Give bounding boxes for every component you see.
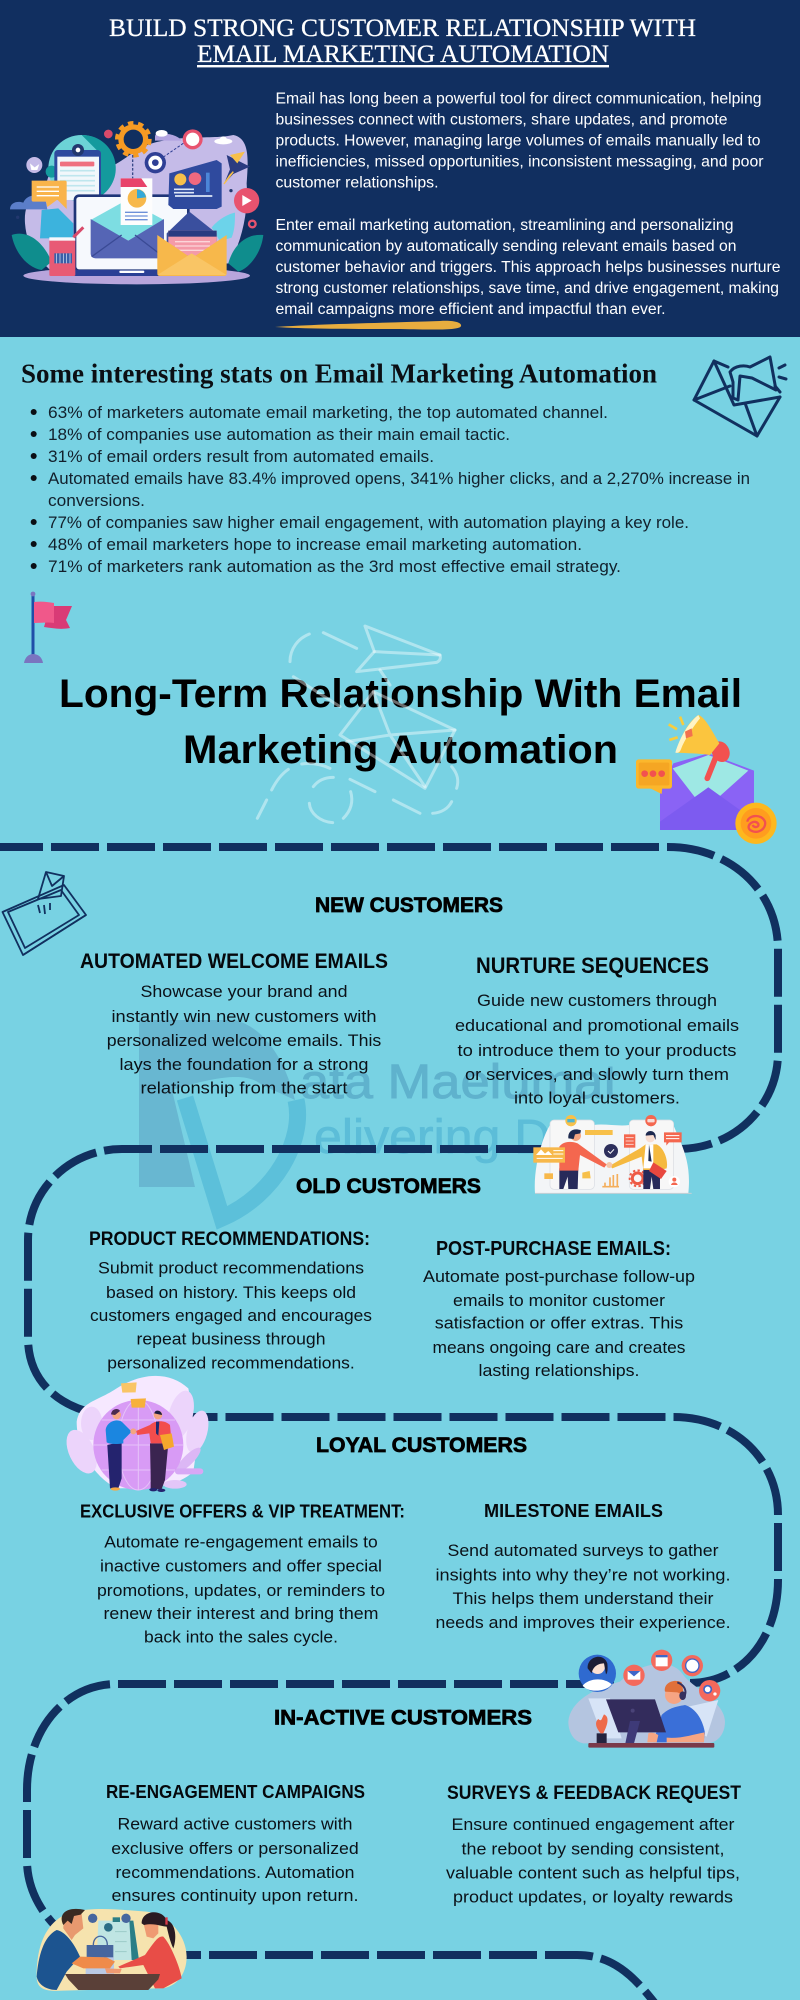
main title [59,672,742,772]
card: surveys and feedback: SURVEYS & FEEDBACK REQUEST [447,1782,741,1804]
decorative paper planes [257,626,458,823]
card: nurture sequences: to introduce them to your products [458,1042,736,1060]
card: product recommendations: repeat business through [136,1330,326,1348]
intro text: strong customer relationships, save time, and drive engagement, making [276,280,779,297]
card: product recommendations [89,1229,372,1372]
card: automated welcome emails: lays the foundation for a strong [120,1056,368,1074]
card: milestone emails [436,1500,730,1632]
card: nurture sequences: into loyal customers. [514,1090,680,1108]
stats list: 18% of companies use automation as their main email tactic. [48,426,510,444]
card: re-engagement campaigns: Reward active customers with [118,1816,352,1834]
intro text [276,90,780,318]
illustration: email marketing laptop and envelopes [10,123,263,284]
section: new customers [80,894,739,1108]
section: in-active customers: IN-ACTIVE CUSTOMERS [274,1706,532,1730]
dashed journey path [0,847,778,2000]
intro text: Email has long been a powerful tool for direct communication, helping [276,90,762,108]
card: exclusive offers: EXCLUSIVE OFFERS & VIP TREATMENT: [80,1500,405,1522]
card: product recommendations: Submit product recommendations [98,1260,364,1278]
header title: BUILD STRONG CUSTOMER RELATIONSHIP WITH [109,15,696,42]
card: re-engagement campaigns: exclusive offers or personalized [111,1840,359,1858]
stats heading: Some interesting stats on Email Marketing Automation [21,359,657,389]
card: automated welcome emails: instantly win new customers with [112,1008,376,1026]
stats list: 63% of marketers automate email marketing, the top automated channel. [48,404,608,422]
card: product recommendations: PRODUCT RECOMMENDATIONS: [89,1229,370,1250]
card: surveys and feedback: Ensure continued engagement after [452,1816,735,1834]
card: nurture sequences: Guide new customers through [477,992,717,1010]
card: exclusive offers: Automate re-engagement emails to [104,1534,378,1552]
intro text: customer relationships. [276,174,438,192]
card: nurture sequences: educational and promotional emails [455,1017,739,1035]
watermark logo: ata Maelumat [300,1056,618,1109]
card: re-engagement campaigns: ensures continuity upon return. [112,1887,358,1905]
card: product recommendations: customers engaged and encourages [90,1307,372,1325]
main title: Long-Term Relationship With Email [59,672,742,716]
intro text: email campaigns more efficient and impactful than ever. [276,301,666,318]
stats list: 31% of email orders result from automated emails. [48,448,434,466]
card: exclusive offers: promotions, updates, or reminders to [97,1582,385,1600]
card: post-purchase emails: emails to monitor customer [453,1292,666,1310]
intro text: inefficiencies, missed opportunities, inconsistent messaging, and poor [276,154,764,170]
card: post-purchase emails: satisfaction or offer extras. This [435,1314,683,1332]
intro text: customer behavior and triggers. This approach helps businesses nurture [276,259,780,276]
stats list: 77% of companies saw higher email engagement, with automation playing a key role. [48,514,689,532]
card: nurture sequences: or services, and slowly turn them [465,1066,729,1084]
intro text: products. However, managing large volumes of emails manually led to [276,132,760,150]
stats list: 48% of email marketers hope to increase email marketing automation. [48,536,582,554]
card: milestone emails: Send automated surveys to gather [448,1542,719,1560]
card: re-engagement campaigns: recommendations. Automation [116,1864,354,1882]
main title: Marketing Automation [183,728,618,772]
section: new customers: NEW CUSTOMERS [315,894,503,917]
icon: pink flag [24,592,72,663]
yellow brush stroke [275,321,461,330]
header title [109,15,696,68]
card: nurture sequences: NURTURE SEQUENCES [476,953,709,978]
card: milestone emails: needs and improves their experience. [436,1614,730,1632]
illustration: megaphone and envelope [636,715,777,844]
card: post-purchase emails: lasting relationships. [478,1362,640,1380]
section: loyal customers [80,1434,730,1646]
card: re-engagement campaigns [106,1781,365,1905]
illustration: customer support agent [568,1650,725,1748]
card: automated welcome emails: Showcase your brand and [140,983,348,1001]
card: re-engagement campaigns: RE-ENGAGEMENT CAMPAIGNS [106,1781,365,1802]
intro text: businesses connect with customers, share updates, and promote [276,112,728,128]
card: nurture sequences [455,953,739,1108]
card: milestone emails: MILESTONE EMAILS [484,1500,663,1521]
card: surveys and feedback: the reboot by sending consistent, [462,1840,724,1858]
card: exclusive offers: renew their interest and bring them [104,1605,378,1623]
card: automated welcome emails [80,950,388,1098]
card: product recommendations: based on history. This keeps old [106,1284,356,1302]
card: post-purchase emails [423,1238,695,1380]
watermark logo [139,1020,620,1218]
card: surveys and feedback: valuable content such as helpful tips, [446,1864,740,1882]
card: automated welcome emails: AUTOMATED WELCOME EMAILS [80,950,388,973]
card: exclusive offers [80,1500,405,1646]
illustration: shopkeeper and customer handshake [37,1909,187,1991]
card: surveys and feedback: product updates, or loyalty rewards [453,1888,733,1906]
card: automated welcome emails: relationship from the start [140,1080,348,1098]
icon: envelope with megaphone outline [694,357,786,436]
stats list: Automated emails have 83.4% improved opens, 341% higher clicks, and a 2,270% increase in [48,470,750,488]
card: post-purchase emails: POST-PURCHASE EMAILS: [436,1238,671,1260]
section: old customers [89,1175,695,1380]
intro text: communication by automatically sending relevant emails based on [276,238,736,255]
card: product recommendations: personalized recommendations. [107,1354,355,1372]
stats list [31,404,750,576]
section: old customers: OLD CUSTOMERS [296,1175,481,1198]
header panel [0,0,800,337]
illustration: business handshake [533,1115,692,1193]
card: post-purchase emails: Automate post-purchase follow-up [423,1268,695,1286]
header title: EMAIL MARKETING AUTOMATION [197,41,609,68]
card: exclusive offers: inactive customers and offer special [100,1558,382,1576]
watermark logo: elivering Data [314,1111,620,1164]
illustration: handshake on purple globe [60,1376,213,1492]
card: post-purchase emails: means ongoing care and creates [432,1339,686,1357]
icon: laptop with envelope [2,872,86,955]
card: surveys and feedback [446,1782,741,1906]
card: milestone emails: insights into why they’re not working. [436,1566,730,1584]
stats list: conversions. [48,492,145,510]
card: automated welcome emails: personalized welcome emails. This [107,1032,381,1050]
stats list: 71% of marketers rank automation as the 3rd most effective email strategy. [48,558,621,576]
card: milestone emails: This helps them understand their [452,1590,714,1608]
section: in-active customers [106,1706,741,1906]
card: exclusive offers: back into the sales cycle. [144,1628,338,1646]
intro text: Enter email marketing automation, streamlining and personalizing [276,217,734,234]
section: loyal customers: LOYAL CUSTOMERS [316,1434,527,1457]
